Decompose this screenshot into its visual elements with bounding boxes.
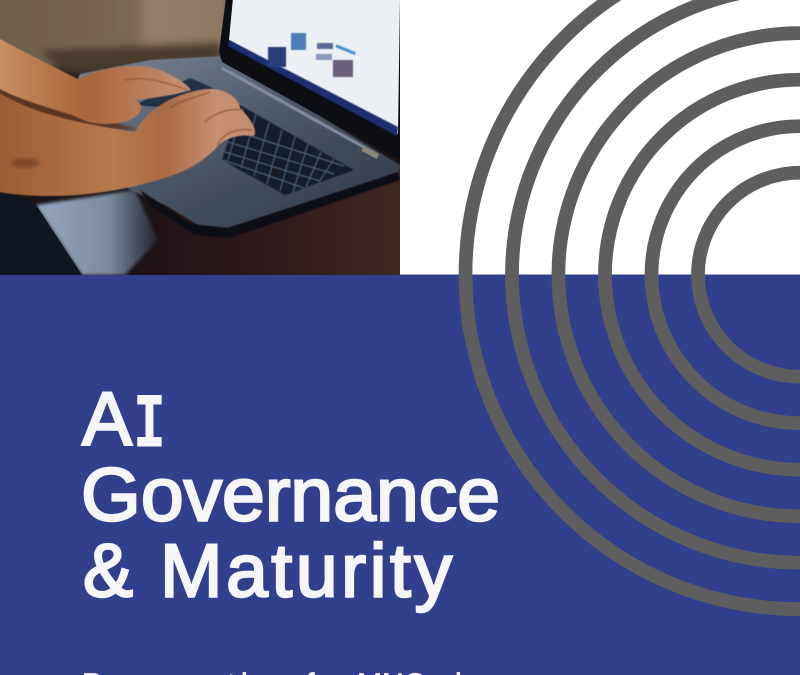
title: &	[83, 528, 133, 612]
laptop deck	[60, 56, 400, 228]
blurred wall backdrop	[0, 0, 230, 75]
photo: hands typing on a laptop	[0, 0, 400, 275]
concentric rings	[466, 0, 800, 609]
table surface	[176, 165, 400, 275]
deck front shadow	[140, 172, 400, 238]
knuckle shading	[125, 79, 252, 146]
lower hand and forearm	[0, 89, 255, 196]
screen widgets	[268, 33, 356, 77]
title: Governance	[81, 452, 500, 536]
title: A	[82, 376, 132, 460]
hinge strip	[222, 68, 378, 155]
title	[81, 376, 500, 612]
table reflection	[36, 190, 158, 275]
keyboard	[135, 78, 354, 195]
taskbar	[228, 40, 398, 136]
laptop screen	[229, 0, 400, 134]
upper hand	[0, 38, 191, 124]
title: Maturity	[160, 528, 452, 612]
arm gap shade	[0, 88, 137, 132]
title: I	[134, 385, 165, 467]
lower left shadow	[0, 190, 82, 275]
laptop lid	[219, 0, 400, 160]
background panel: navy lower section	[0, 274, 800, 675]
